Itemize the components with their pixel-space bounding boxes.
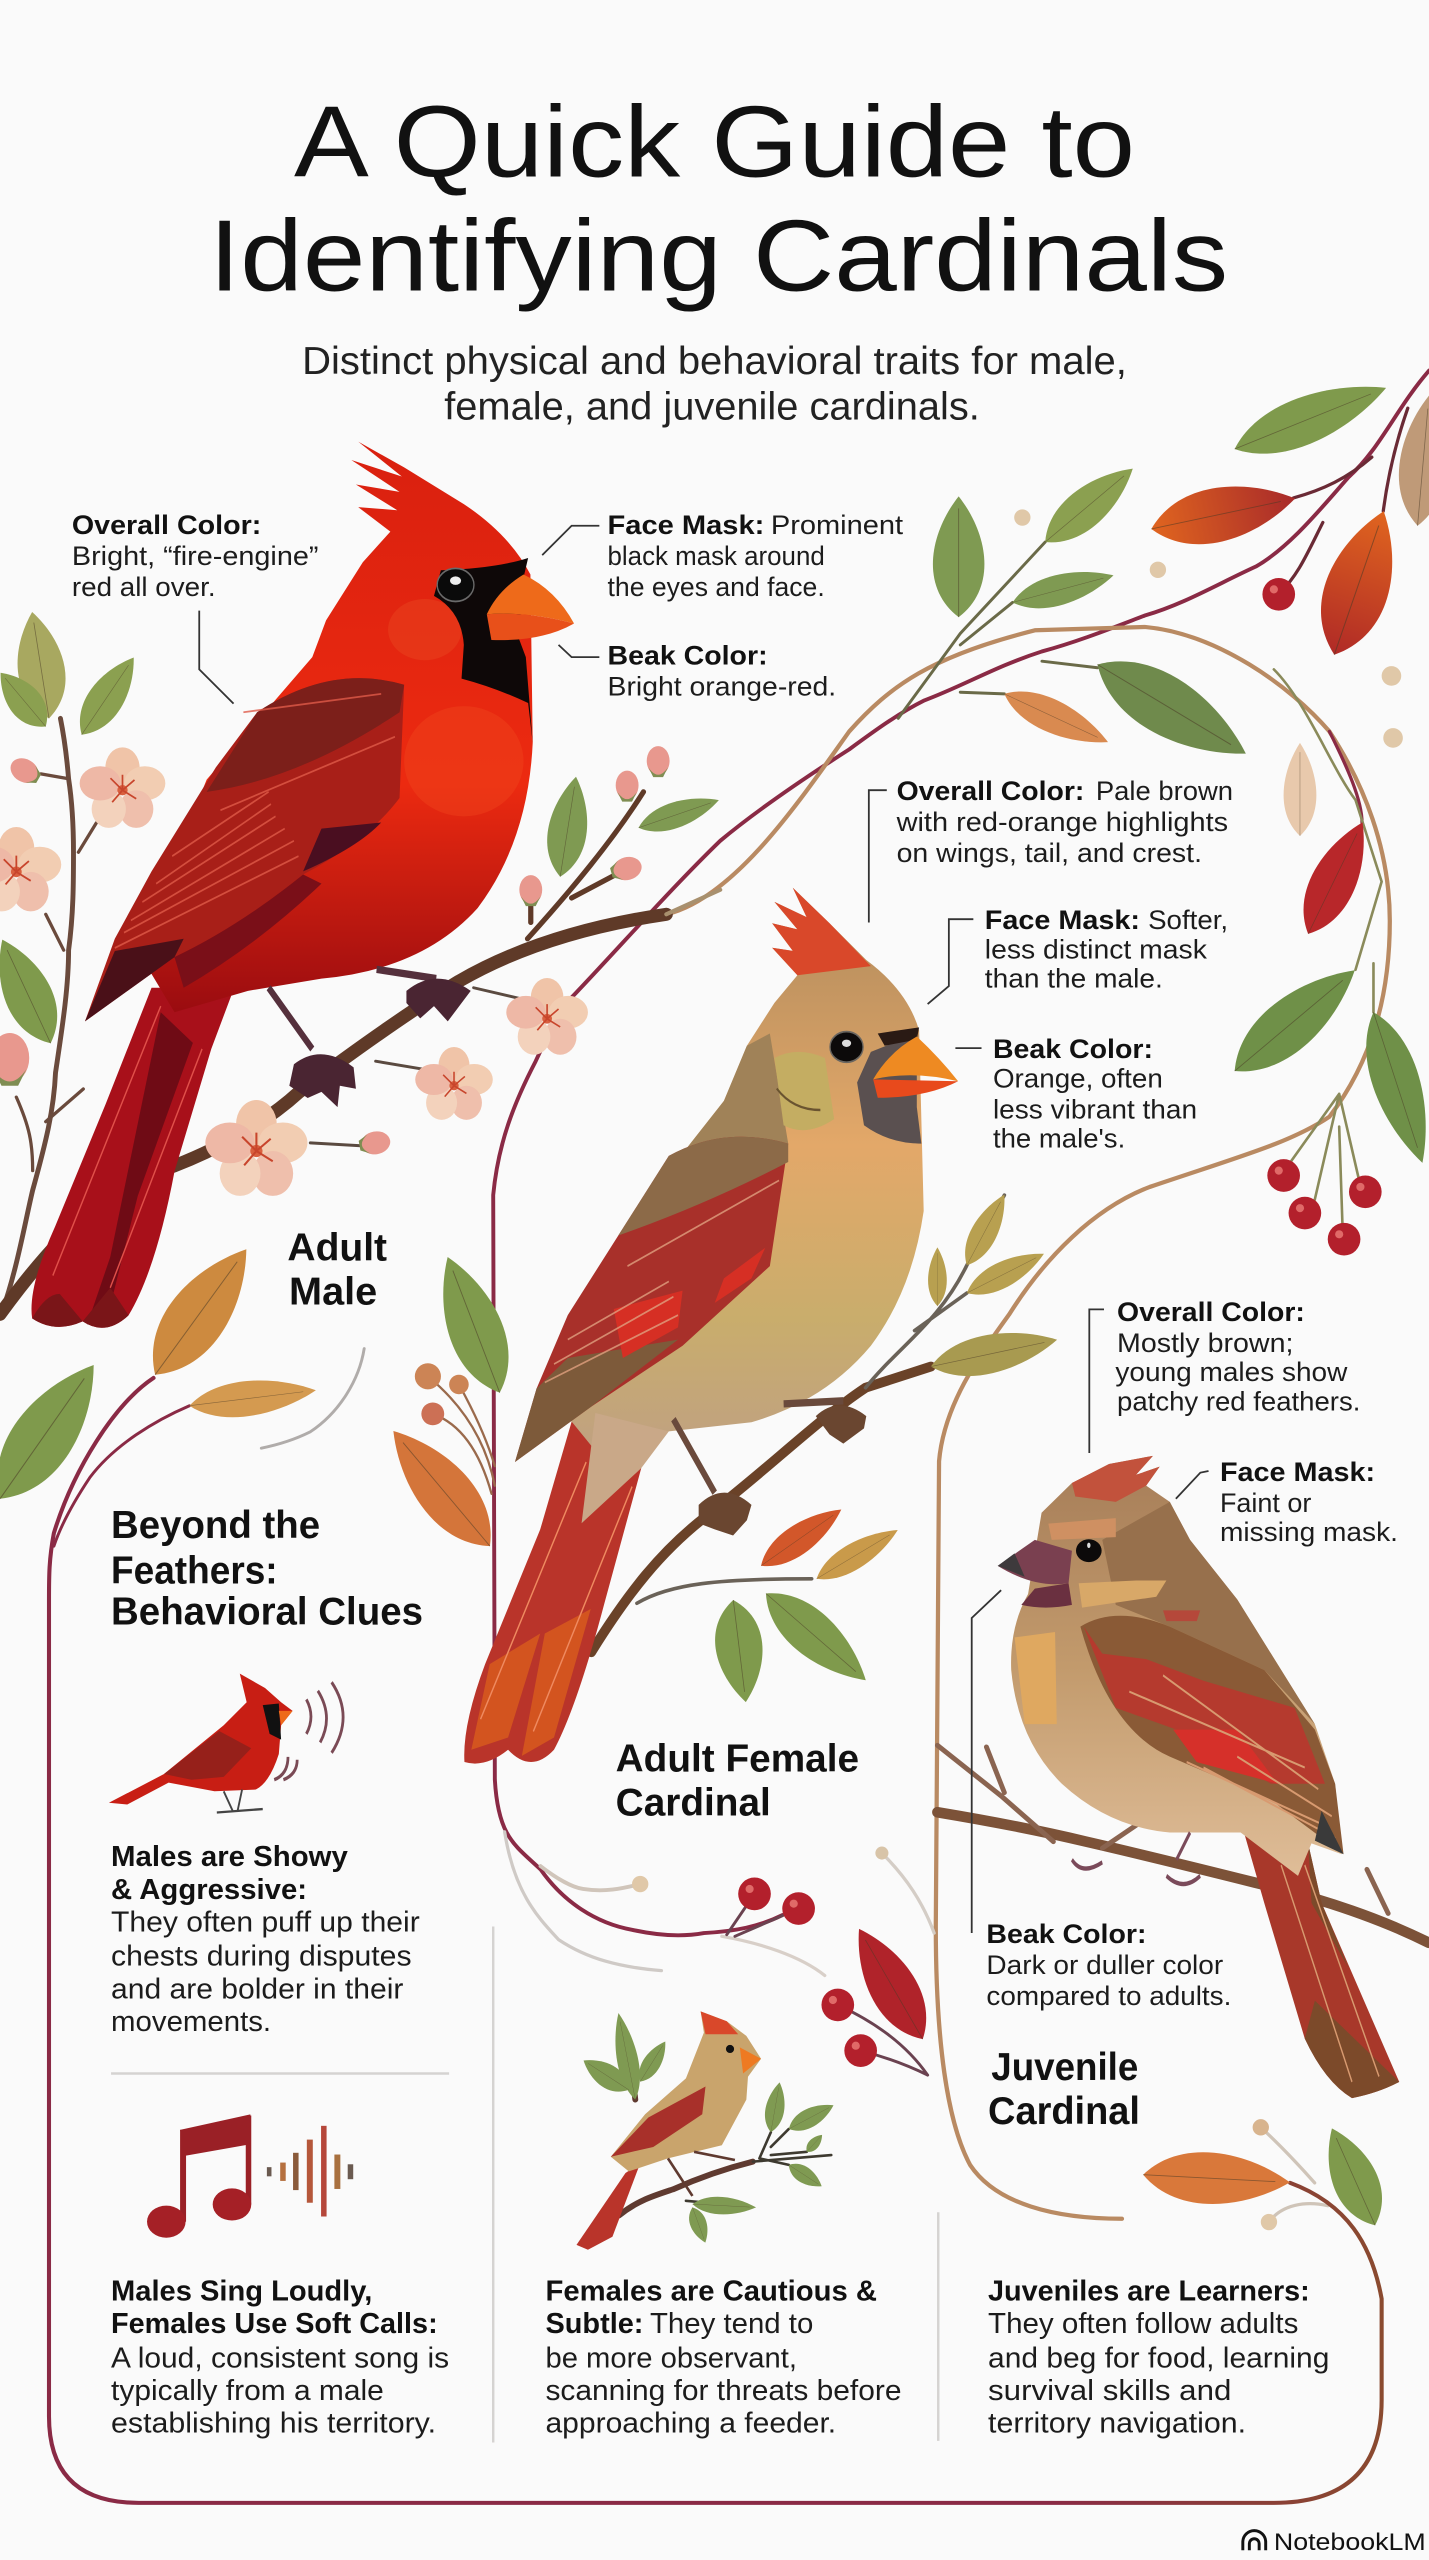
text: males sing loudly: typically from a male bbox=[111, 2375, 384, 2407]
text: males sing loudly: establishing his territory. bbox=[111, 2408, 436, 2440]
juvenile wing bbox=[1080, 1616, 1344, 1854]
juvenile callouts: Beak Color: bbox=[986, 1919, 1146, 1949]
icon: singing male cardinal bbox=[109, 1674, 343, 1812]
text: males sing loudly: Females Use Soft Calls: bbox=[111, 2308, 438, 2340]
title: A Quick Guide to bbox=[294, 85, 1135, 198]
female callouts: with red-orange highlights bbox=[896, 807, 1228, 837]
male body bbox=[138, 442, 533, 1012]
heading: adult female: Cardinal bbox=[616, 1782, 771, 1825]
text: females are cautious: They tend to bbox=[650, 2308, 813, 2340]
text: males are showy: They often puff up their bbox=[111, 1906, 420, 1938]
text: juveniles are learners: territory navigation. bbox=[988, 2408, 1246, 2440]
heading: behavioral clues: Behavioral Clues bbox=[111, 1590, 423, 1633]
male tail bbox=[31, 988, 234, 1328]
juvenile branch bbox=[937, 1745, 1429, 1943]
male legs bbox=[269, 969, 436, 1049]
female callouts: Orange, often bbox=[993, 1063, 1163, 1093]
male callouts: the eyes and face. bbox=[608, 572, 825, 602]
female callouts: Beak Color: bbox=[993, 1034, 1153, 1064]
juvenile callouts: Faint or bbox=[1220, 1488, 1311, 1518]
female eye bbox=[830, 1032, 863, 1062]
title: Identifying Cardinals bbox=[209, 200, 1228, 313]
text: males are showy: Males are Showy bbox=[111, 1841, 348, 1873]
male callouts: Face Mask: bbox=[608, 510, 764, 540]
juvenile eye bbox=[1076, 1539, 1102, 1562]
text: females are cautious: scanning for threats before bbox=[545, 2375, 901, 2407]
text: females are cautious bbox=[545, 2275, 901, 2440]
text: females are cautious: be more observant, bbox=[545, 2342, 797, 2374]
heading: adult male bbox=[287, 1226, 387, 1313]
male wing bbox=[85, 678, 404, 1021]
juvenile cardinal bbox=[998, 1456, 1399, 2098]
title bbox=[209, 85, 1228, 313]
juvenile callouts bbox=[972, 1297, 1398, 2011]
female branch with leaves bbox=[591, 1189, 1061, 1705]
juvenile callouts: young males show bbox=[1115, 1357, 1348, 1387]
heading: juvenile: Cardinal bbox=[988, 2090, 1140, 2133]
male beak bbox=[487, 574, 574, 623]
adult male cardinal bbox=[31, 442, 574, 1328]
text: males are showy: chests during disputes bbox=[111, 1941, 412, 1973]
juvenile callouts: Dark or duller color bbox=[986, 1950, 1223, 1980]
text: females are cautious: approaching a feeder. bbox=[545, 2408, 836, 2440]
juvenile callouts: missing mask. bbox=[1220, 1517, 1398, 1547]
female callouts bbox=[869, 776, 1233, 1154]
heading: juvenile: Juvenile bbox=[991, 2046, 1138, 2089]
female callouts: Overall Color: bbox=[897, 776, 1084, 806]
male eye bbox=[437, 568, 474, 601]
text: juveniles are learners: They often follow adults bbox=[988, 2308, 1298, 2340]
panel border: behavioral clues bbox=[49, 1378, 1382, 2503]
juvenile tail bbox=[1244, 1833, 1399, 2098]
heading: adult male: Adult bbox=[287, 1226, 387, 1269]
juvenile callouts: Overall Color: bbox=[1117, 1297, 1305, 1327]
heading: behavioral clues: Beyond the bbox=[111, 1504, 320, 1547]
heading: adult male: Male bbox=[289, 1270, 377, 1313]
left blossom plant bbox=[0, 718, 165, 1318]
male callouts: Overall Color: bbox=[72, 510, 261, 540]
juvenile callouts: Mostly brown; bbox=[1117, 1328, 1293, 1358]
female body bbox=[545, 888, 924, 1462]
male callouts: Beak Color: bbox=[608, 640, 768, 670]
juvenile beak bbox=[998, 1540, 1072, 1584]
adult female cardinal bbox=[464, 888, 958, 1764]
female tail bbox=[464, 1419, 641, 1764]
female beak bbox=[873, 1037, 958, 1081]
female wing bbox=[515, 1137, 788, 1462]
male callouts: Bright orange-red. bbox=[608, 672, 836, 702]
juvenile callouts: Face Mask: bbox=[1220, 1457, 1375, 1487]
NotebookLM logo: NotebookLM bbox=[1274, 2529, 1426, 2556]
female callouts: Softer, bbox=[1148, 905, 1228, 935]
subtitle: female, and juvenile cardinals. bbox=[444, 386, 980, 429]
text: juveniles are learners: and beg for food, learning bbox=[988, 2342, 1329, 2374]
subtitle bbox=[302, 340, 1127, 429]
text: males are showy: & Aggressive: bbox=[111, 1874, 307, 1906]
subtitle: Distinct physical and behavioral traits for male, bbox=[302, 340, 1127, 383]
female callouts: than the male. bbox=[985, 964, 1163, 994]
male callouts: Prominent bbox=[771, 510, 904, 540]
text: males sing loudly: A loud, consistent song is bbox=[111, 2342, 449, 2374]
male branch with blossoms bbox=[0, 746, 723, 1314]
female callouts: Face Mask: bbox=[985, 905, 1140, 935]
text: females are cautious: Females are Cautious & bbox=[545, 2275, 877, 2307]
female callouts: the male's. bbox=[993, 1124, 1125, 1154]
text: juveniles are learners: survival skills and bbox=[988, 2375, 1231, 2407]
text: males sing loudly bbox=[111, 2275, 449, 2440]
juvenile feet bbox=[1072, 1833, 1200, 1884]
heading: juvenile bbox=[988, 2046, 1140, 2133]
text: males are showy: movements. bbox=[111, 2006, 271, 2038]
text: females are cautious: Subtle: bbox=[545, 2308, 643, 2340]
text: juveniles are learners: Juveniles are Learners: bbox=[988, 2275, 1310, 2307]
male callouts: black mask around bbox=[608, 541, 825, 571]
decorative leaves and berries bbox=[0, 366, 1429, 2234]
icon: music note and sound wave bbox=[147, 2114, 353, 2238]
male mask bbox=[434, 558, 533, 743]
female mask bbox=[857, 1033, 921, 1144]
text: juveniles are learners bbox=[988, 2275, 1329, 2440]
male callouts: Bright, “fire-engine” bbox=[72, 541, 318, 571]
text: males sing loudly: Males Sing Loudly, bbox=[111, 2275, 372, 2307]
heading: behavioral clues: Feathers: bbox=[111, 1550, 278, 1593]
female callouts: less distinct mask bbox=[985, 934, 1207, 964]
juvenile callouts: compared to adults. bbox=[986, 1981, 1231, 2011]
female legs bbox=[673, 1401, 843, 1493]
heading: adult female bbox=[616, 1737, 859, 1825]
female callouts: on wings, tail, and crest. bbox=[897, 838, 1202, 868]
juvenile callouts: patchy red feathers. bbox=[1117, 1387, 1360, 1417]
icon: small female cardinal bbox=[576, 2011, 838, 2250]
male callouts: red all over. bbox=[72, 572, 216, 602]
juvenile body bbox=[1011, 1456, 1342, 1876]
heading: adult female: Adult Female bbox=[616, 1737, 859, 1780]
text: males are showy bbox=[111, 1841, 420, 2038]
female callouts: less vibrant than bbox=[993, 1094, 1197, 1124]
male callouts bbox=[72, 510, 904, 704]
heading: behavioral clues bbox=[111, 1504, 423, 1633]
text: males are showy: and are bolder in their bbox=[111, 1973, 404, 2005]
female callouts: Pale brown bbox=[1096, 776, 1233, 806]
decorative vines bbox=[261, 371, 1429, 2222]
